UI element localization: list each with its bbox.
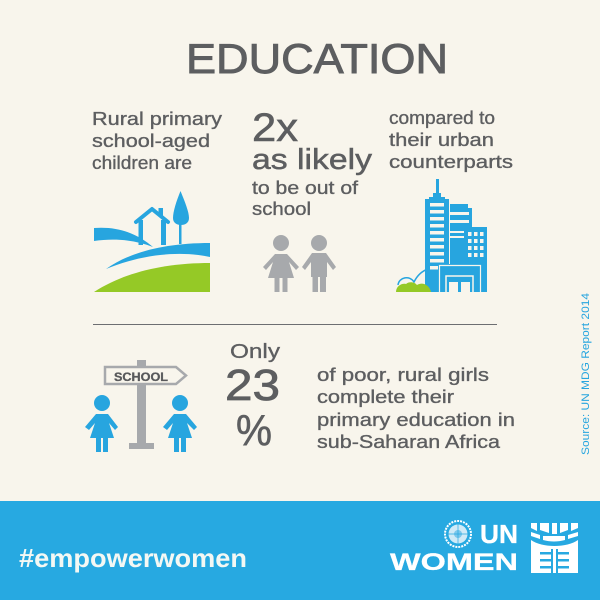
text block: only 23 percent: % xyxy=(236,406,272,455)
footer band xyxy=(0,501,600,600)
text block: rural children: Rural primary xyxy=(92,108,223,129)
icon: school signpost with girls xyxy=(85,360,197,452)
icon: girl right xyxy=(163,395,197,452)
text block: poor rural girls: sub-Saharan Africa xyxy=(317,431,501,452)
text block: 2x as likely xyxy=(252,106,373,219)
text block: urban counterparts: counterparts xyxy=(389,151,513,172)
text block: poor rural girls xyxy=(317,364,515,452)
text block: poor rural girls: primary education in xyxy=(317,409,515,430)
logo wordmark: UN xyxy=(480,519,518,549)
text block: urban counterparts xyxy=(389,107,513,172)
text block: poor rural girls: of poor, rural girls xyxy=(317,364,489,385)
text block: only 23 percent: 23 xyxy=(225,361,280,410)
text block: 2x as likely: school xyxy=(252,198,311,219)
icon: two children, grey xyxy=(263,235,336,292)
signpost: SCHOOL xyxy=(114,370,168,384)
text block: rural children: children are xyxy=(92,152,192,173)
icon: girl left xyxy=(85,395,118,452)
text block: 2x as likely: as likely xyxy=(252,144,373,176)
text block: urban counterparts: their urban xyxy=(389,129,494,150)
logo: UN Women: WOMEN xyxy=(390,549,518,576)
text block: 2x as likely: 2x xyxy=(252,106,298,150)
icon: rural landscape xyxy=(94,191,210,292)
text block: only 23 percent xyxy=(225,340,281,455)
text block: poor rural girls: complete their xyxy=(317,386,454,407)
icon: UN globe xyxy=(445,521,471,547)
text block: only 23 percent: Only xyxy=(230,340,281,363)
icon: city xyxy=(396,179,487,292)
text block: rural children xyxy=(92,108,223,173)
icon: girl xyxy=(263,235,299,292)
icon: boy xyxy=(302,235,336,292)
source note: Source: UN MDG Report 2014 xyxy=(580,293,592,455)
title: EDUCATION xyxy=(186,35,448,82)
text block: urban counterparts: compared to xyxy=(389,107,495,128)
text block: rural children: school-aged xyxy=(92,130,210,151)
icon: UN Women emblem xyxy=(531,523,578,573)
logo: UN Women xyxy=(390,519,578,576)
text block: 2x as likely: to be out of xyxy=(252,177,359,198)
hashtag: #empowerwomen xyxy=(19,543,247,573)
divider line xyxy=(93,324,497,325)
